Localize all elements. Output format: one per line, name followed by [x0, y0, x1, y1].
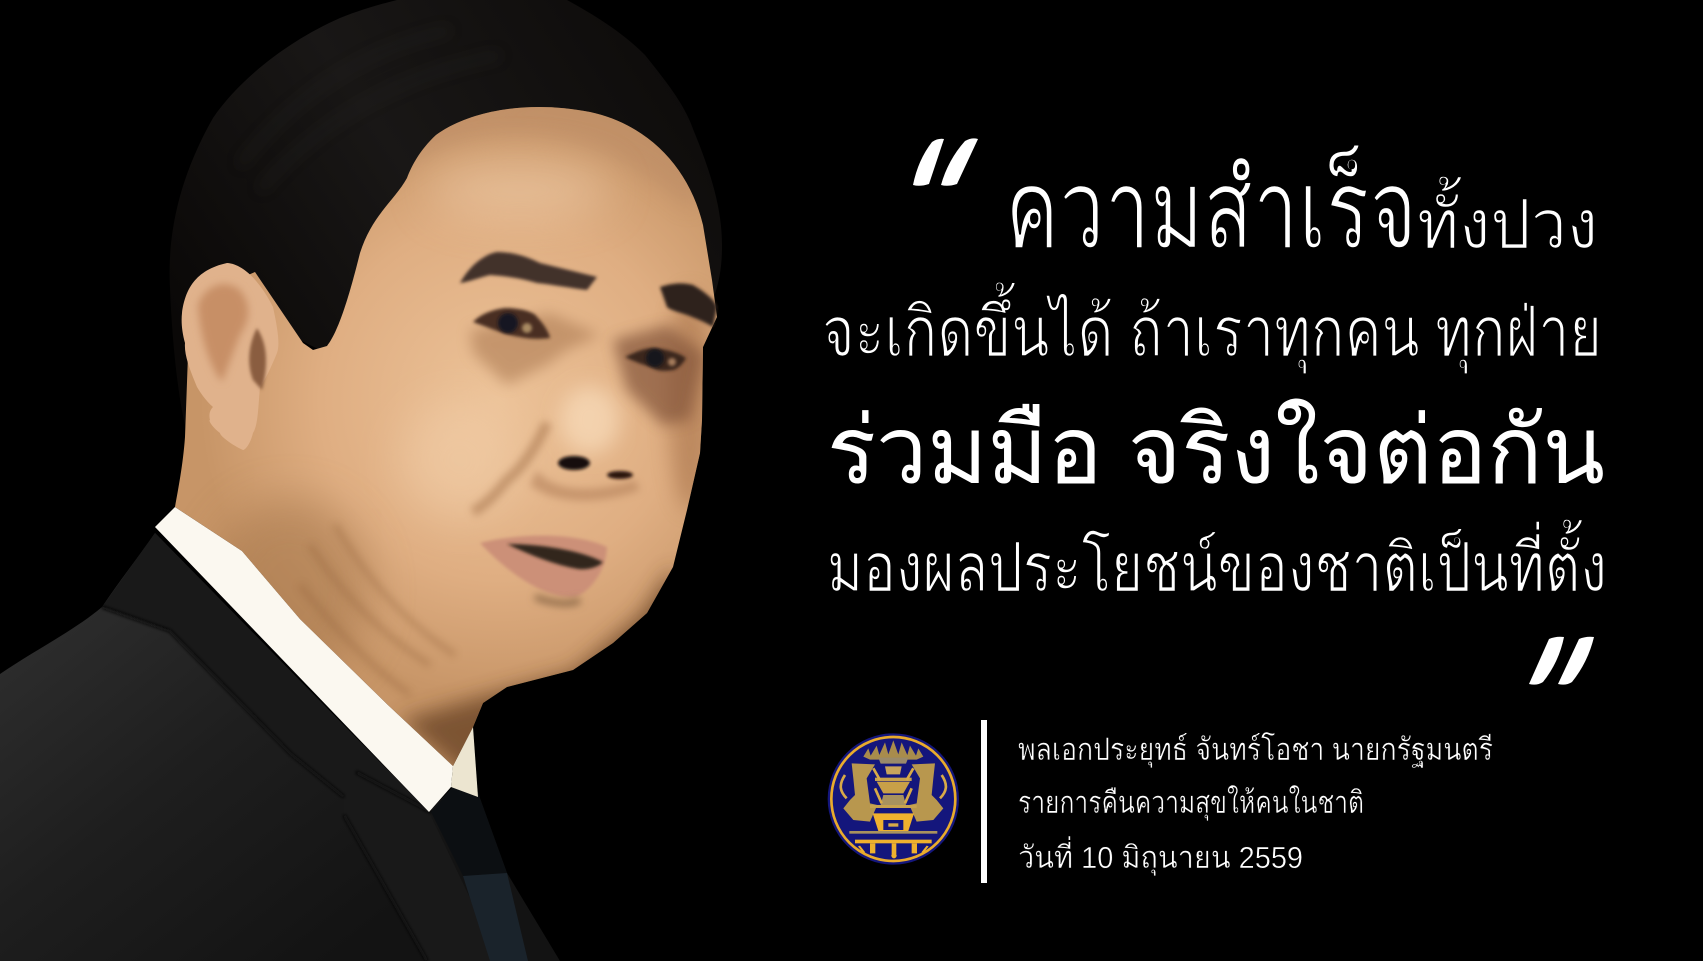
- seal: right guardian lion: [909, 763, 943, 822]
- attribution text: รายการคืนความสุขให้คนในชาติ: [1018, 785, 1364, 822]
- seal: side scrolls: [841, 775, 946, 798]
- quote line 1: ทั้งปวง: [1417, 176, 1598, 263]
- attribution text: วันที่ 10 มิถุนายน 2559: [1018, 836, 1303, 877]
- seal: left guardian lion: [843, 763, 877, 822]
- portrait: suit jacket: [0, 533, 560, 961]
- portrait: right eyebrow: [660, 283, 717, 327]
- seal: vessel: [873, 758, 913, 805]
- portrait: inner collar: [451, 727, 478, 797]
- portrait: right nostril: [607, 471, 633, 479]
- portrait: tie blade: [463, 873, 528, 961]
- quote line 1: ความสำเร็จ: [1005, 144, 1417, 272]
- portrait: hair highlights: [240, 30, 500, 190]
- portrait: suit seam shadows: [102, 607, 431, 961]
- divider: [981, 720, 987, 883]
- portrait: left nostril: [558, 456, 590, 470]
- portrait: nose underside: [530, 470, 640, 501]
- icon: government seal: [828, 733, 959, 865]
- portrait: [0, 0, 722, 961]
- portrait: right eye: [625, 348, 686, 371]
- seal: flames: [863, 740, 923, 760]
- attribution text: [1018, 732, 1493, 877]
- portrait: hair: [170, 0, 722, 433]
- quote line 3: ร่วมมือ จริงใจต่อกัน: [827, 398, 1605, 503]
- portrait: shirt collar: [155, 507, 453, 812]
- portrait: tie knot: [431, 787, 507, 876]
- portrait: face and neck: [175, 107, 717, 766]
- portrait: left eyebrow: [460, 252, 597, 290]
- closing quotation mark: [1529, 637, 1594, 685]
- portrait: mouth: [480, 536, 607, 603]
- portrait: facial shading: [210, 80, 720, 790]
- portrait: left eye: [473, 308, 550, 339]
- seal: base band: [849, 831, 937, 858]
- seal: table: [870, 805, 917, 831]
- portrait: lapel: [102, 533, 500, 961]
- opening quotation mark: [913, 138, 978, 186]
- attribution text: พลเอกประยุทธ์ จันทร์โอชา นายกรัฐมนตรี: [1018, 732, 1493, 769]
- portrait: ear: [182, 263, 278, 450]
